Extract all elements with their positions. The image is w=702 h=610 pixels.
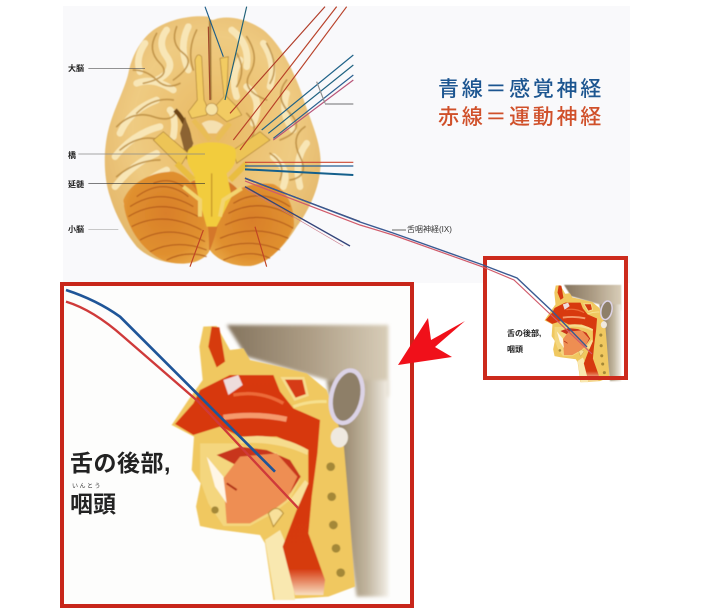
brain part labels [68, 63, 84, 234]
caption furigana: いんとう [72, 483, 102, 490]
label: back of tongue and pharynx small: 咽頭 [507, 345, 523, 354]
panel: enlarged head section [62, 284, 412, 606]
label: pons: 橋 [68, 150, 76, 160]
nerve lines: cranial nerves [190, 7, 360, 267]
nerve lines: long glossopharyngeal route [245, 178, 592, 354]
label: back of tongue and pharynx small [507, 328, 541, 354]
label: cerebrum: 大脳 [68, 63, 84, 73]
label: back of tongue and pharynx small: 舌の後部, [507, 328, 541, 338]
caption: back of tongue: 舌の後部, [70, 450, 171, 476]
illustration: small head section [545, 285, 621, 382]
label: cerebellum: 小脳 [68, 224, 84, 234]
legend: nerve colour key [438, 77, 604, 129]
nerves: blue and red lines in enlarged view [66, 290, 298, 508]
frame: enlarged view [62, 284, 412, 606]
legend: blue sensory nerve: 青線＝感覚神経 [438, 77, 604, 101]
panel: small head inset [485, 258, 626, 382]
illustration: large head section [172, 325, 388, 600]
legend: red motor nerve: 赤線＝運動神経 [438, 106, 604, 129]
label: glossopharyngeal nerve: 舌咽神経(IX) [407, 224, 452, 234]
illustration: underside of brain [78, 7, 360, 267]
panel: brain diagram background [63, 6, 630, 283]
frame: small inset [485, 258, 626, 378]
label leader lines [78, 68, 205, 229]
arrow: red pointing to enlarged view [398, 318, 465, 365]
caption: pharynx: 咽頭 [70, 491, 116, 517]
label: medulla: 延髄 [68, 179, 84, 189]
